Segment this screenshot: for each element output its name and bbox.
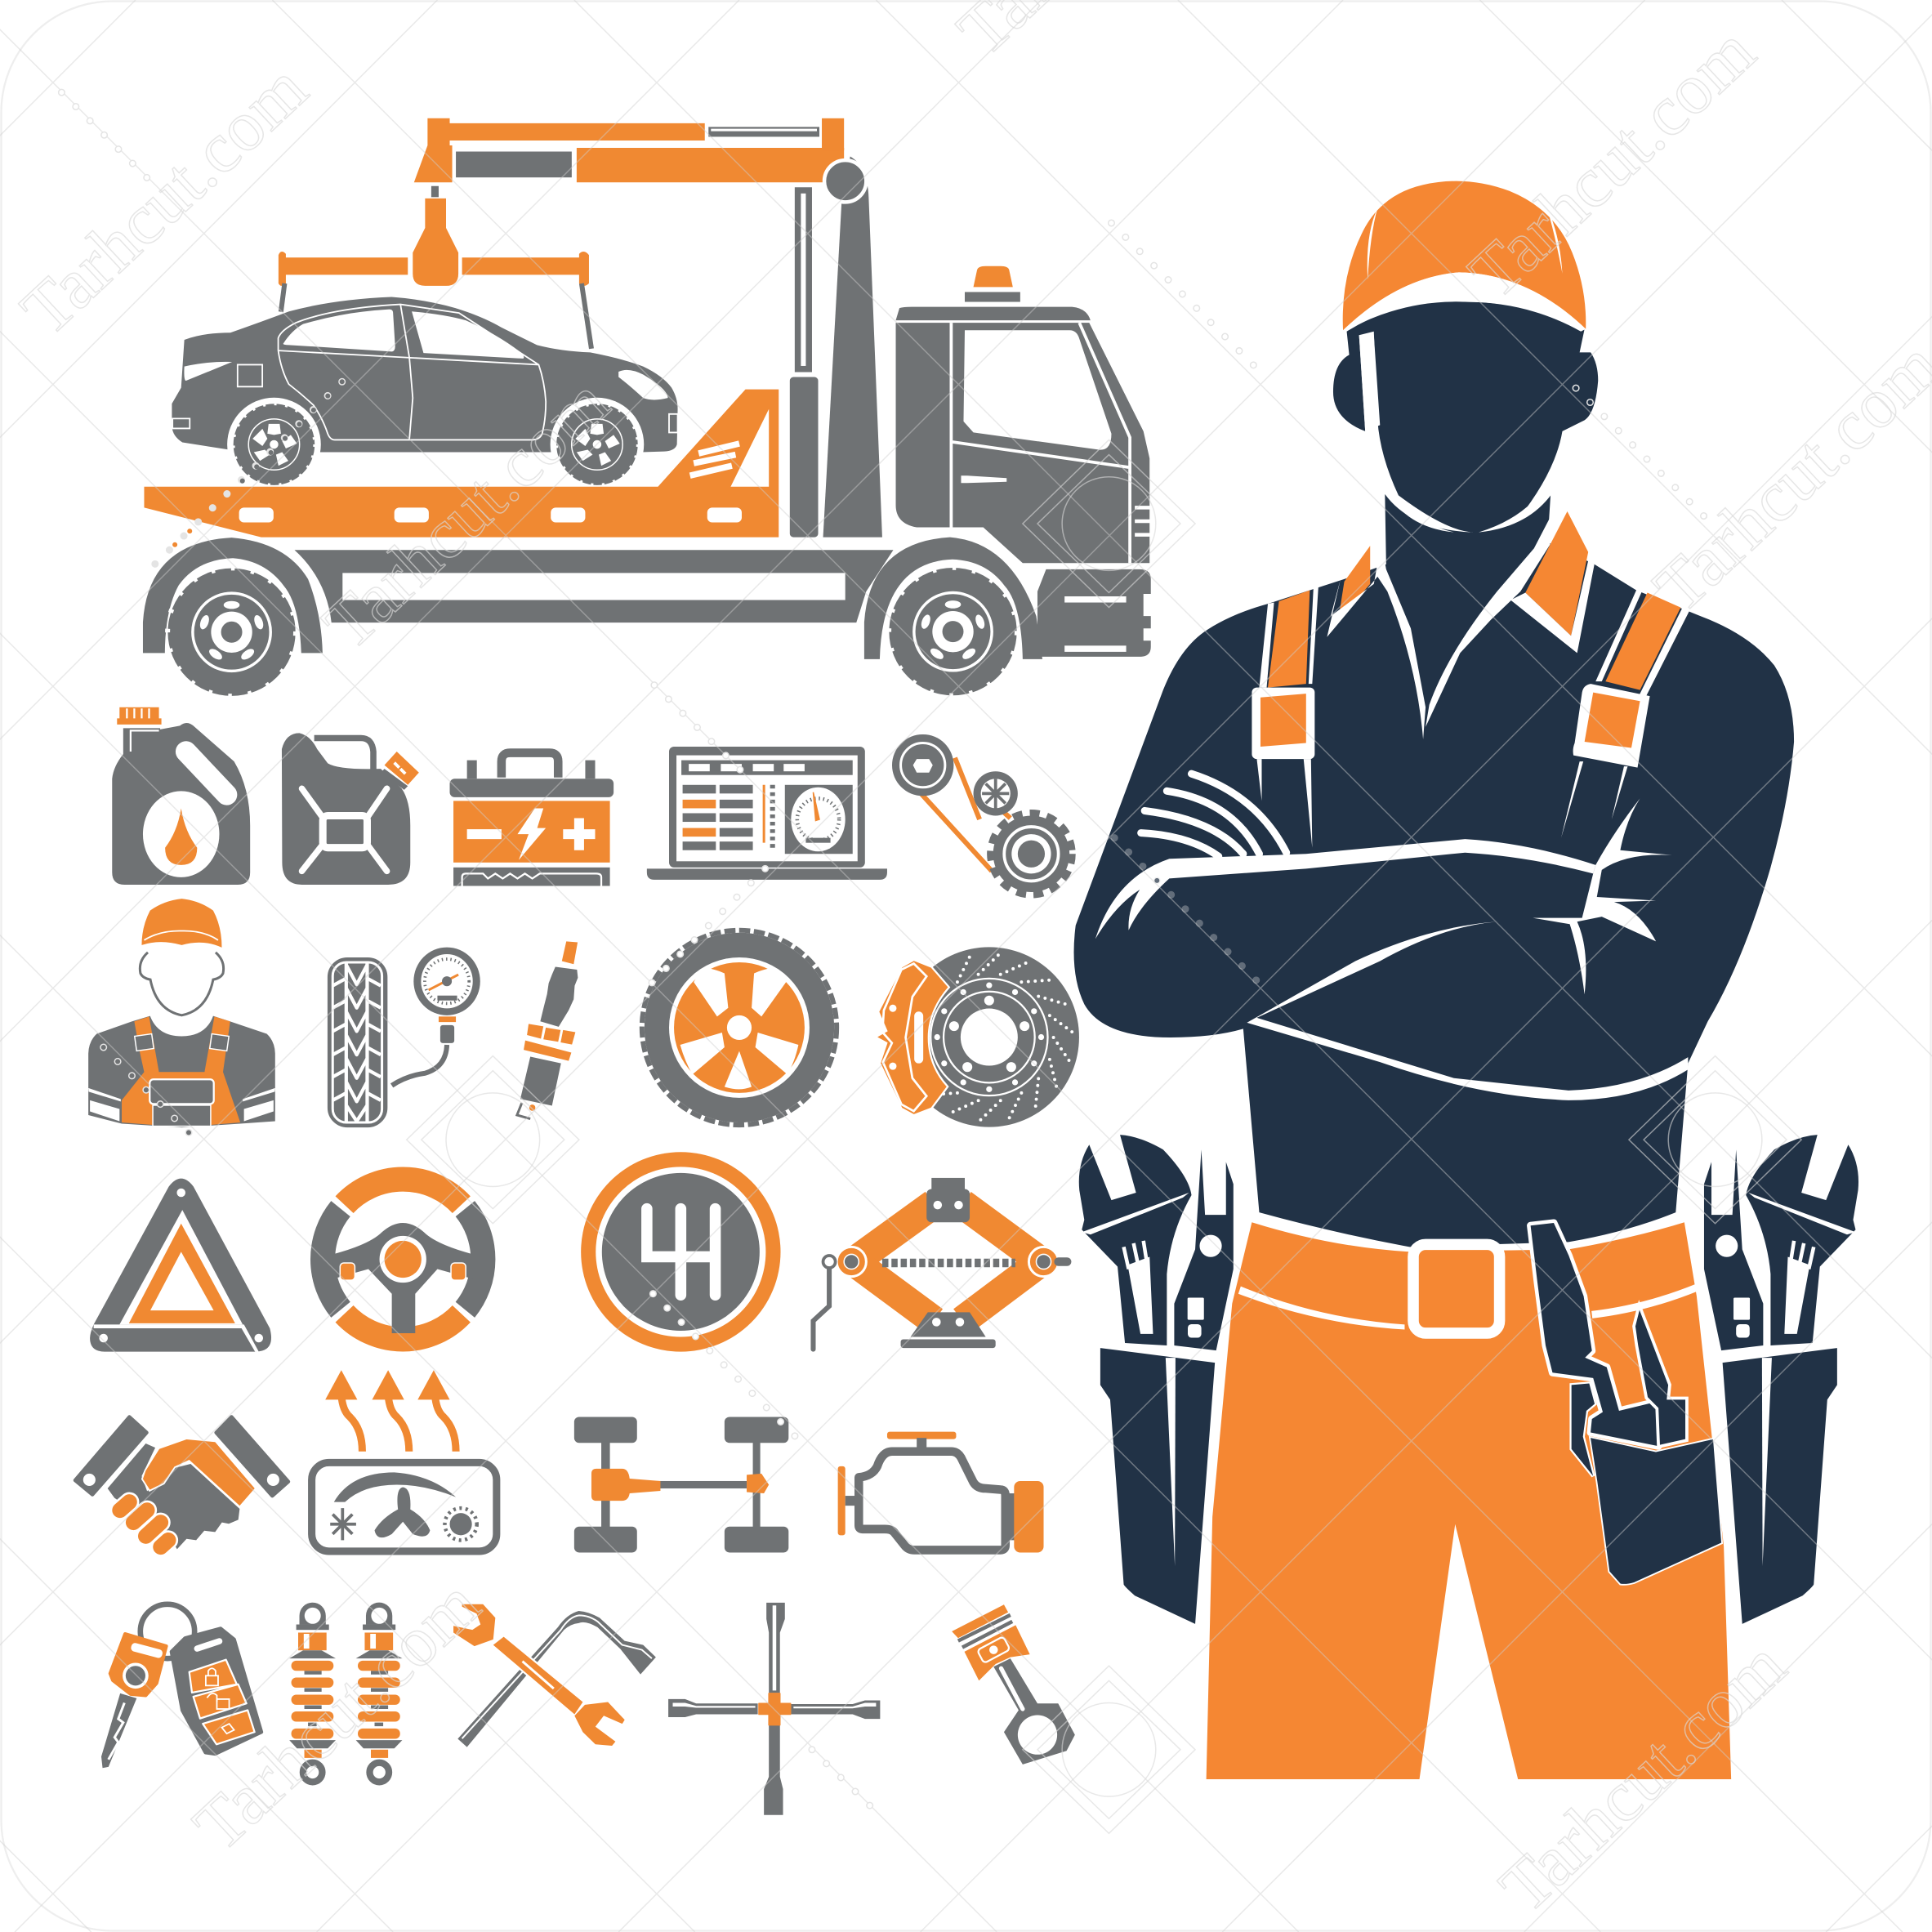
- rear wheel arch and wheel: [143, 538, 323, 696]
- front wheel arch and wheel: [864, 538, 1042, 696]
- icon: tire and pressure gauge: [330, 948, 480, 1125]
- icon: climate panel with heat arrows: [312, 1370, 497, 1551]
- watermark text: Tarhcut.com: [1453, 11, 1769, 313]
- worker figure: [1074, 181, 1858, 1779]
- watermark text: Tarhcut.com: [6, 48, 322, 350]
- icon: mechanic: [88, 899, 275, 1127]
- icon: wheel: [642, 930, 837, 1125]
- icon: warning triangle: [90, 1179, 271, 1352]
- worker: pocket line: [1592, 1287, 1697, 1314]
- icon: car keys and fob: [100, 1604, 261, 1769]
- worker: trousers: [1207, 1222, 1731, 1779]
- icon: scissor jack: [813, 1178, 1067, 1350]
- chassis: [294, 550, 894, 622]
- worker: left tool holster: [1079, 1135, 1234, 1624]
- crane tower: [790, 157, 882, 538]
- icon: spark plug: [517, 941, 578, 1119]
- worker: belt buckle: [1413, 1244, 1500, 1333]
- worker: jaw and neck highlights: [1359, 335, 1552, 533]
- hook and spreader: [279, 186, 591, 349]
- worker: pouch and pliers: [1531, 1223, 1721, 1584]
- icon: axle drivetrain: [574, 1417, 788, 1552]
- worker: head: [1333, 301, 1598, 533]
- car on truck: [172, 297, 678, 491]
- icon: jerry can: [282, 733, 419, 885]
- crane boom: [414, 118, 844, 182]
- worker: left suspender: [1252, 587, 1318, 848]
- icon: engine: [838, 1432, 1044, 1552]
- worker: crossed arm lines: [1095, 798, 1688, 1100]
- icon: piston: [952, 1604, 1075, 1765]
- watermark text: Tarhcut.com: [1484, 1625, 1800, 1927]
- icon: gear shift knob: [581, 1152, 781, 1352]
- worker: belt line: [1238, 1287, 1404, 1329]
- icon: handshake: [75, 1417, 288, 1549]
- icon: laptop diagnostics: [647, 747, 887, 880]
- icon: crossed wrenches: [453, 1604, 656, 1747]
- watermark text: Tarhcut.com: [178, 1564, 494, 1866]
- worker: cap: [1343, 181, 1586, 332]
- icon: car battery: [450, 753, 614, 886]
- icon: cross lug wrench: [668, 1603, 880, 1815]
- truck: [143, 118, 1151, 696]
- worker: fingers: [1141, 774, 1287, 856]
- worker: right tool holster: [1704, 1135, 1858, 1624]
- worker: collar: [1327, 511, 1595, 739]
- icon: timing belt: [892, 734, 1072, 895]
- watermark text: Tarhcut.com: [308, 362, 623, 664]
- icon: brake disc and caliper: [876, 947, 1079, 1127]
- icon: shock absorbers: [289, 1603, 402, 1782]
- worker: torso and arms: [1074, 484, 1794, 1247]
- icon: oil jug: [112, 707, 250, 885]
- icon: steering wheel: [323, 1180, 483, 1339]
- worker: right suspender: [1561, 590, 1690, 838]
- flatbed: [144, 390, 779, 538]
- cab: [896, 266, 1151, 657]
